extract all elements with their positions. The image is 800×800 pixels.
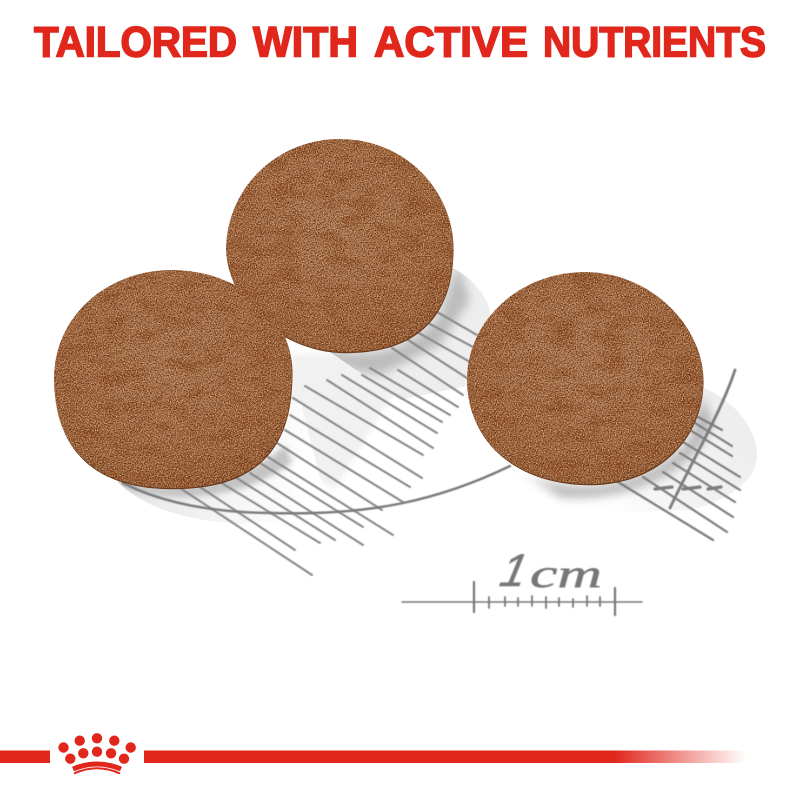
handwritten 1cm <box>496 544 602 596</box>
kibble: top centre <box>226 139 454 353</box>
sketch hatching: right <box>618 370 740 540</box>
title: WITH <box>253 18 358 66</box>
kibble cast shadows <box>100 260 770 530</box>
handwritten 1cm: cm <box>530 551 602 596</box>
icon: crown logo <box>58 733 136 774</box>
kibble: right <box>467 272 704 485</box>
scale: 1 cm <box>402 544 642 615</box>
title: TAILORED <box>34 18 237 66</box>
title: ACTIVE <box>374 18 528 66</box>
title <box>34 18 766 66</box>
sketch curve under kibbles <box>123 466 510 513</box>
title: NUTRIENTS <box>543 18 766 66</box>
handwritten 1cm: 1 <box>496 544 532 596</box>
scale minor ticks <box>489 596 600 608</box>
footer bar right <box>144 750 746 763</box>
sketch hatching: left and centre <box>180 312 477 575</box>
kibble: left <box>54 270 292 489</box>
scale end ticks <box>474 582 615 615</box>
footer bar left <box>0 750 50 763</box>
scale axis <box>402 601 642 603</box>
